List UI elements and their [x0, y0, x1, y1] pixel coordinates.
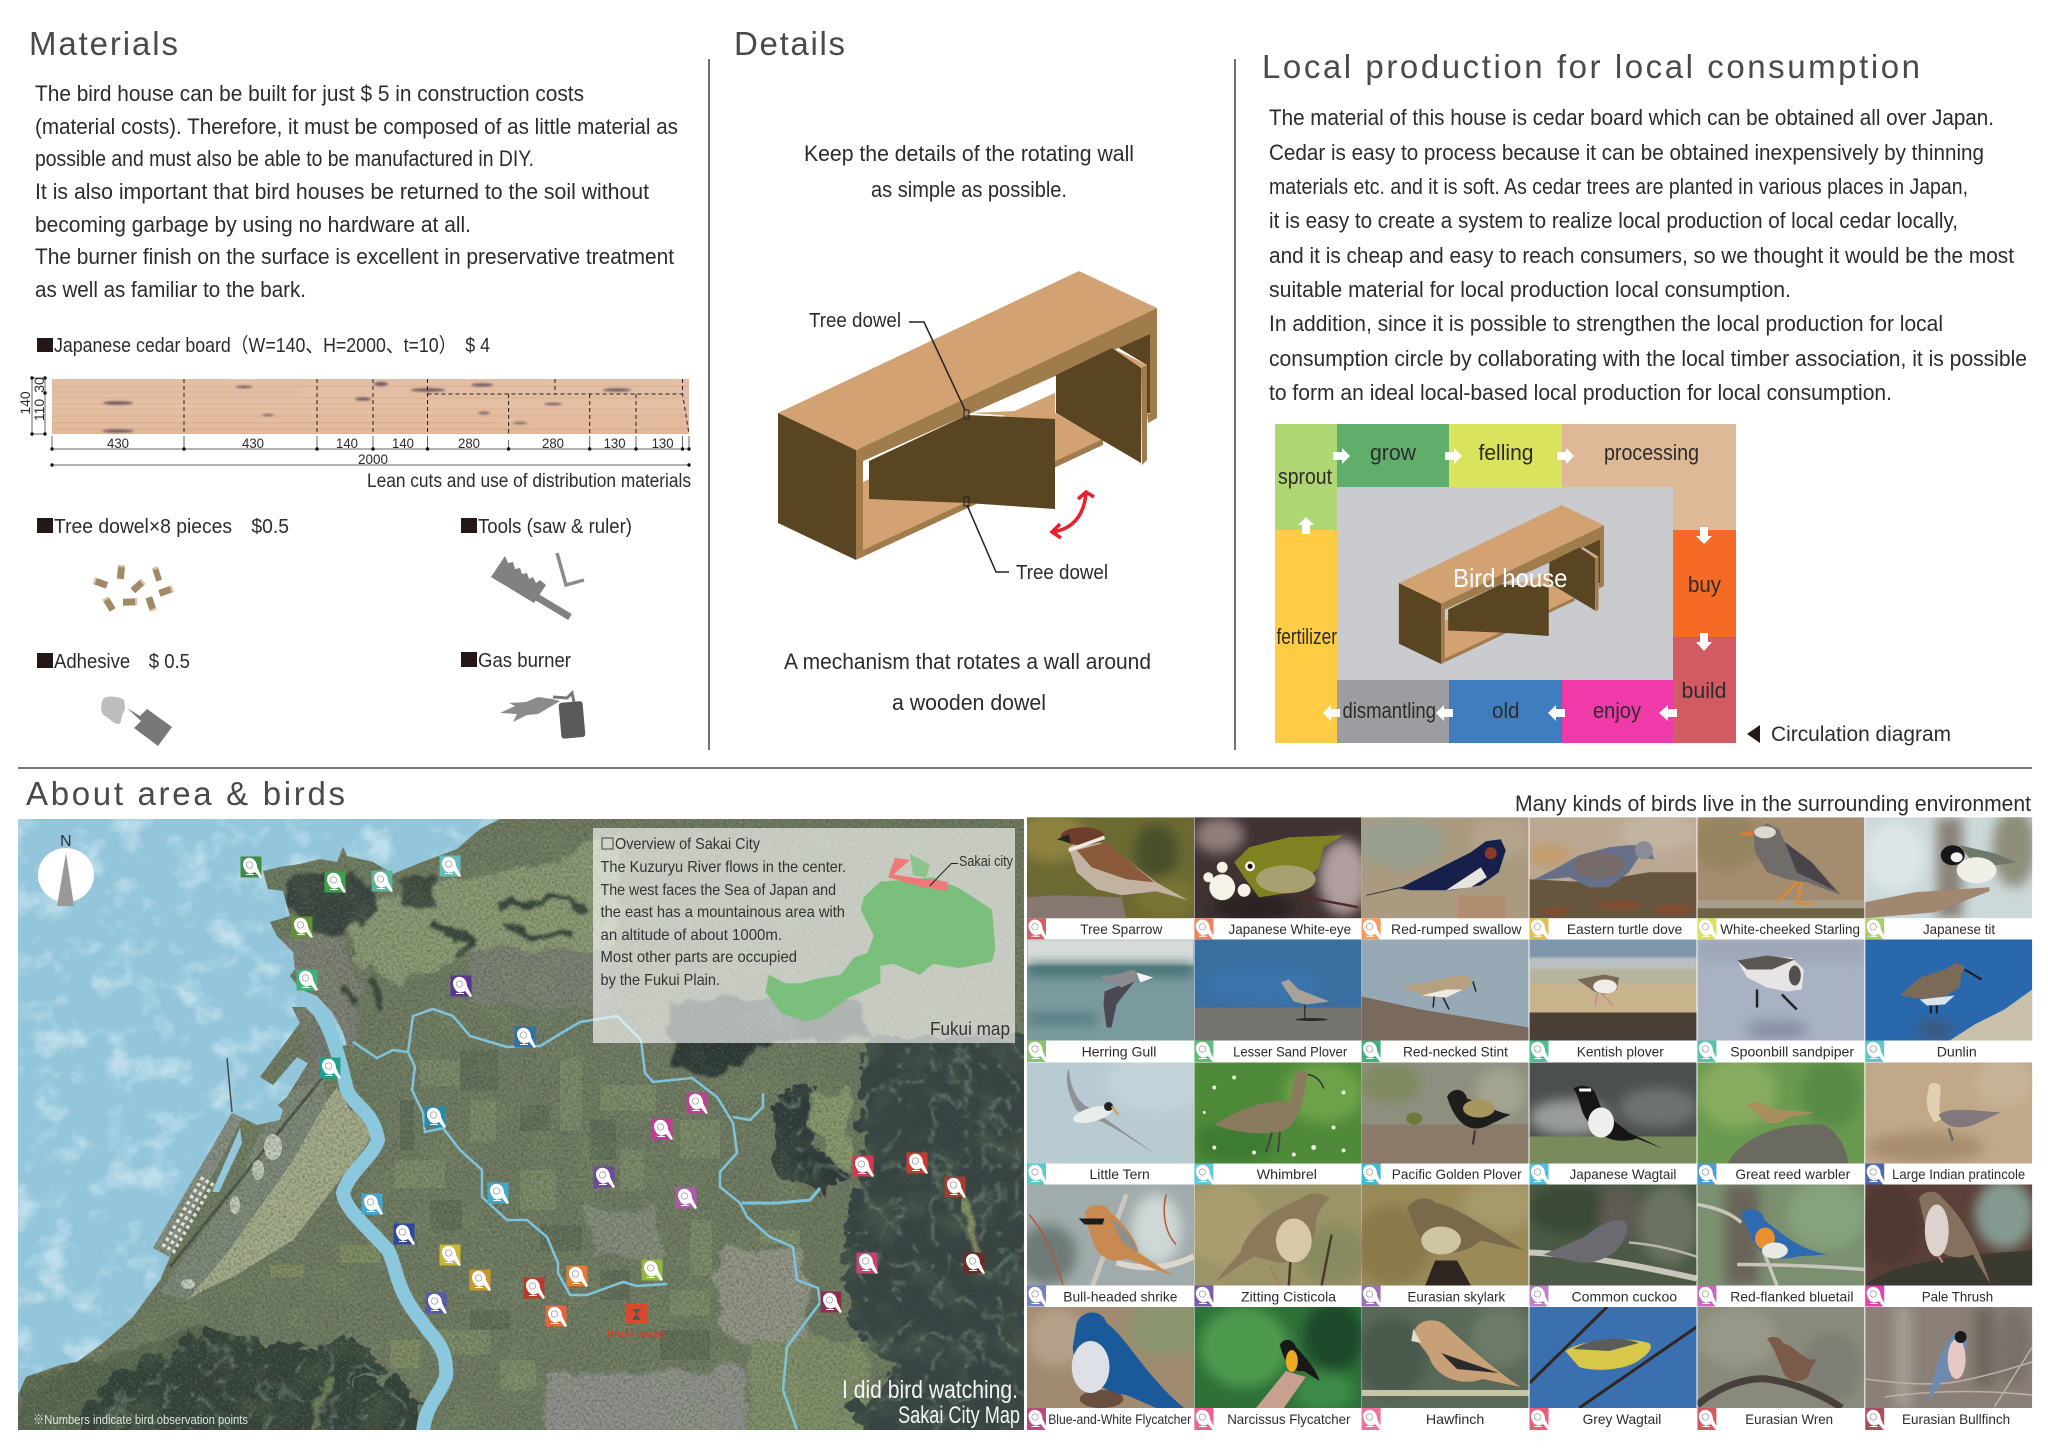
dowel callout: upper: Tree dowel: [809, 310, 901, 332]
caption: circulation diagram: Circulation diagram: [1771, 723, 1951, 746]
map: Sakai City satellite: [18, 819, 1030, 1440]
name: Eurasian skylark: [1408, 1289, 1506, 1305]
stage: old: [1449, 680, 1562, 743]
name: Red-necked Stint: [1403, 1044, 1508, 1060]
card: Great reed warbler: [1697, 1058, 1864, 1185]
text block: mechanism: a wooden dowel: [892, 690, 1046, 715]
text block: materials intro: The bird house can be built for just $ 5 in construction costs: [35, 81, 584, 106]
name: Kentish plover: [1577, 1044, 1664, 1060]
photo: [1697, 1184, 1864, 1286]
card: Large Indian pratincole: [1865, 1058, 2034, 1185]
text block: materials intro: [35, 81, 678, 302]
photo: [1697, 1062, 1864, 1164]
sub heading: many kinds of birds: Many kinds of birds live in the surrounding environment: [1515, 791, 2031, 816]
text block: local production body: In addition, since it is possible to strengthen the local production for local: [1269, 311, 1943, 336]
icon: [1530, 1164, 1550, 1185]
icon: adhesive bottle: [101, 697, 172, 746]
text: overview: an altitude of about 1000m.: [600, 927, 782, 944]
dowel callout: upper: [809, 310, 969, 419]
icon: saw and ruler: [491, 553, 584, 617]
item heading: tools: Tools (saw & ruler): [478, 516, 632, 538]
icon: tree dowels: [93, 565, 174, 612]
industrial port land: [187, 1087, 370, 1300]
center illustration: bird house: Bird house: [1453, 563, 1568, 593]
southwest forested hills: [78, 1326, 424, 1430]
photo: [1362, 1307, 1529, 1408]
photo: [1530, 1307, 1696, 1408]
photo: [1530, 940, 1696, 1040]
icon: [1194, 1408, 1215, 1430]
stage: sprout: sprout: [1278, 464, 1332, 489]
stage: felling: felling: [1478, 440, 1534, 465]
panel: details: [734, 25, 1157, 715]
icon: [1027, 1164, 1048, 1185]
photo: [1697, 817, 1864, 918]
icon: [1362, 1286, 1382, 1307]
icon: [1194, 1286, 1215, 1307]
icon: [1530, 1286, 1550, 1307]
arrows: circulation flow: [1298, 448, 1712, 721]
panel: materials: [17, 25, 691, 746]
name: Herring Gull: [1082, 1044, 1156, 1060]
dimension labels: 140: [392, 435, 414, 451]
cedar board cutting diagram: [17, 376, 691, 467]
northern farmland and wetlands: [285, 830, 620, 1010]
card: Zitting Cisticola: [1184, 1184, 1368, 1307]
name: Lesser Sand Plover: [1233, 1044, 1348, 1060]
text block: local production body: [1269, 105, 2027, 405]
text block: mechanism: [784, 649, 1151, 715]
text: overview: Most other parts are occupied: [600, 949, 797, 966]
icon: [1362, 1164, 1382, 1185]
photo: [1027, 1062, 1194, 1164]
icon: [1697, 1040, 1718, 1062]
title: Materials: Materials: [29, 25, 178, 62]
name: Whimbrel: [1257, 1166, 1317, 1182]
icon: [1027, 1286, 1048, 1307]
card: Hawfinch: [1357, 1307, 1531, 1430]
name: Bull-headed shrike: [1063, 1289, 1178, 1305]
photo: [1697, 1307, 1864, 1408]
text block: local production body: and it is cheap and easy to reach consumers, so we thought it would be the most: [1269, 243, 2014, 268]
icon: [1194, 918, 1215, 940]
stage: sprout: [1275, 424, 1337, 530]
land texture: [23, 882, 1024, 1430]
label: Sakai city: Sakai city: [959, 853, 1013, 870]
dimension labels: 280: [542, 435, 564, 451]
text block: materials intro: The burner finish on the surface is excellent in preservative treatment: [35, 244, 674, 269]
photo: [1027, 940, 1194, 1040]
grey settlements: [18, 930, 880, 1440]
text block: keep details simple: Keep the details of the rotating wall: [804, 141, 1134, 166]
name: Pale Thrush: [1922, 1289, 1993, 1305]
card: Grey Wagtail: [1530, 1307, 1696, 1430]
dimension labels: 130: [652, 435, 674, 451]
item heading: tree dowel: Tree dowel×8 pieces $0.5: [54, 516, 289, 538]
plain field patches: [395, 1060, 800, 1390]
stage: build: build: [1682, 678, 1726, 703]
circulation diagram: [1275, 424, 1736, 743]
title: Local production: Local production for local consumption: [1262, 48, 1920, 85]
name: Japanese White-eye: [1228, 921, 1351, 937]
stage: dismantling: [1337, 680, 1449, 743]
name: Pacific Golden Plover: [1392, 1166, 1522, 1182]
icon: [1362, 1040, 1382, 1062]
name: Dunlin: [1937, 1044, 1977, 1060]
name: Japanese Wagtail: [1570, 1166, 1676, 1182]
text block: materials intro: (material costs). Therefore, it must be composed of as little material as: [35, 114, 678, 139]
photo: [1530, 1062, 1696, 1164]
stage: buy: [1673, 530, 1736, 637]
card: Eurasian skylark: [1352, 1180, 1541, 1307]
dimension labels: 2000: [358, 451, 388, 467]
text block: materials intro: as well as familiar to the bark.: [35, 277, 306, 302]
stage: enjoy: enjoy: [1593, 698, 1641, 723]
icon: [1865, 1408, 1886, 1430]
eastern mountains: [837, 1030, 1030, 1440]
card: Japanese tit: [1865, 807, 2036, 940]
card: Eurasian Bullfinch: [1865, 1307, 2032, 1430]
icon: [1362, 918, 1382, 940]
text: overview: by the Fukui Plain.: [600, 972, 720, 989]
name: Common cuckoo: [1572, 1289, 1677, 1305]
text block: keep details simple: as simple as possible.: [871, 177, 1067, 202]
text: overview: The Kuzuryu River flows in the center.: [600, 859, 846, 876]
name: Blue-and-White Flycatcher: [1048, 1411, 1191, 1427]
name: Red-rumped swallow: [1391, 921, 1522, 937]
card: Herring Gull: [1027, 940, 1194, 1062]
card: Little Tern: [1027, 1052, 1206, 1185]
item heading: cedar board: Japanese cedar board（W=140、H=2000、t=10） $ 4: [54, 334, 490, 357]
photo: [1362, 940, 1529, 1040]
card: Tree Sparrow: [1017, 812, 1196, 940]
card: White-cheeked Starling: [1692, 814, 1864, 940]
photo: [1865, 1184, 2032, 1286]
dimension labels: [17, 377, 674, 467]
name: Hawfinch: [1426, 1411, 1484, 1427]
title: About area & birds: About area & birds: [26, 775, 345, 812]
dimension labels: 110: [31, 399, 47, 421]
card: Blue-and-White Flycatcher: [1027, 1297, 1206, 1430]
photo: [1865, 1307, 2032, 1408]
mini map: Fukui: [765, 854, 995, 1021]
caption: lean cuts: Lean cuts and use of distribution materials: [367, 471, 691, 492]
dimension labels: 30: [31, 377, 47, 393]
photo: [1362, 1062, 1529, 1164]
stage: grow: grow: [1370, 440, 1416, 465]
west fields patch: [270, 1245, 420, 1368]
card: Pacific Golden Plover: [1362, 1062, 1529, 1185]
name: Red-flanked bluetail: [1730, 1289, 1854, 1305]
icon: [1530, 1040, 1550, 1062]
photo: [1194, 1062, 1362, 1164]
text block: materials intro: becoming garbage by using no hardware at all.: [35, 212, 471, 237]
name: Tree Sparrow: [1080, 921, 1163, 937]
compass: north: N: [60, 833, 72, 850]
card: Japanese Wagtail: [1530, 1062, 1698, 1185]
item heading: gas burner: Gas burner: [478, 650, 571, 672]
stage: buy: buy: [1688, 572, 1721, 597]
text: overview: [600, 836, 846, 989]
land: [18, 819, 1024, 1430]
stage: dismantling: dismantling: [1342, 698, 1436, 723]
stage: processing: processing: [1604, 440, 1699, 465]
text block: mechanism: A mechanism that rotates a wall around: [784, 649, 1151, 674]
photo: [1530, 1184, 1696, 1286]
caption: bird watching: [842, 1376, 1020, 1429]
name: Narcissus Flycatcher: [1227, 1411, 1351, 1427]
divider: materials / details: [708, 59, 710, 750]
stage: grow: [1337, 424, 1449, 487]
text block: local production body: suitable material for local production local consumption.: [1269, 277, 1791, 302]
name: Spoonbill sandpiper: [1730, 1044, 1854, 1060]
icon: [1697, 1164, 1718, 1185]
bird photo grid: [1017, 807, 2036, 1430]
card: Kentish plover: [1530, 940, 1696, 1062]
card: Narcissus Flycatcher: [1194, 1302, 1363, 1430]
photo: [1027, 1307, 1194, 1408]
text block: local production body: it is easy to create a system to realize local production of local cedar locally,: [1269, 208, 1958, 233]
photo: [1865, 817, 2032, 918]
text: overview: Overview of Sakai City: [615, 836, 760, 853]
card: Japanese White-eye: [1194, 817, 1368, 940]
icon: [1027, 1408, 1048, 1430]
Kuzuryu river: [320, 1013, 446, 1432]
dimension lines: [32, 378, 689, 465]
observation point markers: [240, 856, 985, 1327]
dimension labels: 140: [336, 435, 358, 451]
item heading: adhesive: Adhesive $ 0.5: [54, 651, 190, 673]
text block: local production body: consumption circle by collaborating with the local timber association, it is possible: [1269, 346, 2027, 371]
icon: [1530, 918, 1550, 940]
text block: local production body: The material of this house is cedar board which can be obtained all over Japan.: [1269, 105, 1994, 130]
card: Red-rumped swallow: [1357, 817, 1531, 940]
dimension labels: 130: [604, 435, 626, 451]
caption: bird watching: Sakai City Map: [898, 1402, 1020, 1429]
icon: [1194, 1040, 1215, 1062]
icon: [1865, 1286, 1886, 1307]
card: Spoonbill sandpiper: [1697, 940, 1864, 1062]
marker: Bird House location: [607, 1304, 664, 1341]
name: Zitting Cisticola: [1241, 1289, 1336, 1305]
marker: Bird House location: Bird House: [607, 1326, 664, 1341]
tributaries: [353, 1009, 820, 1430]
stage: old: old: [1492, 698, 1520, 723]
photo: [1194, 1184, 1362, 1286]
icon: [1697, 1408, 1718, 1430]
card: Eurasian Wren: [1697, 1307, 1864, 1430]
photo: [1865, 940, 2032, 1040]
card: Whimbrel: [1194, 1062, 1363, 1185]
text block: materials intro: possible and must also be able to be manufactured in DIY.: [35, 146, 534, 171]
photo: [1027, 1184, 1194, 1286]
text block: local production body: Cedar is easy to process because it can be obtained inexpensively by thinning: [1269, 140, 1984, 165]
name: Eurasian Wren: [1745, 1411, 1833, 1427]
name: Large Indian pratincole: [1892, 1166, 2025, 1182]
compass: north: [38, 833, 94, 906]
name: Great reed warbler: [1735, 1166, 1851, 1182]
name: Eastern turtle dove: [1567, 921, 1683, 937]
panel: about area and birds: [18, 775, 2031, 1440]
dimension labels: 140: [17, 391, 33, 415]
name: Little Tern: [1090, 1166, 1150, 1182]
dimension labels: 280: [458, 435, 480, 451]
name: Japanese tit: [1923, 921, 1995, 937]
card: Dunlin: [1865, 940, 2032, 1062]
icon: [1865, 1040, 1886, 1062]
note: observation points: ※Numbers indicate bird observation points: [33, 1412, 248, 1427]
text block: local production body: materials etc. and it is soft. As cedar trees are planted in various places in Japan,: [1269, 174, 1968, 199]
icon: [1865, 918, 1886, 940]
text block: materials intro: It is also important that bird houses be returned to the soil without: [35, 179, 649, 204]
center illustration: bird house: [1399, 505, 1604, 664]
photo: [1865, 1062, 2032, 1164]
text: overview: the east has a mountainous area with: [600, 904, 845, 921]
label: Fukui map: Fukui map: [930, 1019, 1010, 1039]
photo: [1194, 1307, 1362, 1408]
icon: [1697, 1286, 1718, 1307]
caption: bird watching: I did bird watching.: [842, 1376, 1018, 1404]
name: Eurasian Bullfinch: [1902, 1411, 2010, 1427]
text: overview: The west faces the Sea of Japan and: [600, 882, 836, 899]
name: White-cheeked Starling: [1720, 921, 1860, 937]
divider: top / bottom: [18, 767, 2032, 769]
dowel callout: lower: Tree dowel: [1016, 562, 1108, 584]
dimension labels: 430: [107, 435, 129, 451]
card: Pale Thrush: [1860, 1180, 2034, 1307]
overlay panel: overview of Sakai City: [593, 828, 1015, 1043]
photo: [1027, 817, 1194, 918]
stage: build: [1673, 637, 1736, 743]
icon: gas burner: [500, 693, 586, 739]
photo: [1697, 940, 1864, 1040]
dimension labels: 430: [242, 435, 264, 451]
photo: [1194, 817, 1362, 918]
photo: [1362, 817, 1529, 918]
icon: [1697, 918, 1718, 940]
icon: [1194, 1164, 1215, 1185]
card: Red-flanked bluetail: [1697, 1180, 1866, 1307]
card: Eastern turtle dove: [1528, 814, 1698, 940]
stage: processing: [1562, 424, 1736, 530]
dowel callout: lower: [964, 497, 1108, 584]
arrow: rotation direction: [1052, 492, 1094, 538]
icon: [1027, 1040, 1048, 1062]
title: Details: Details: [734, 25, 845, 62]
photo: [1530, 817, 1696, 918]
stage: enjoy: [1562, 680, 1673, 743]
text block: local production body: to form an ideal local-based local production for local consumption.: [1269, 380, 1892, 405]
icon: [1027, 918, 1048, 940]
icon: [1362, 1408, 1382, 1430]
text block: keep details simple: [804, 141, 1134, 202]
stage: fertilizer: [1275, 530, 1337, 743]
illustration: bird house with rotating wall: [778, 271, 1157, 560]
photo: [1194, 940, 1362, 1040]
card: Bull-headed shrike: [1017, 1184, 1194, 1307]
stage: felling: [1449, 424, 1562, 487]
icon: [1865, 1164, 1886, 1185]
divider: details / local production: [1234, 59, 1236, 750]
card: Lesser Sand Plover: [1194, 940, 1361, 1062]
card: Common cuckoo: [1530, 1184, 1698, 1307]
icon: [1530, 1408, 1550, 1430]
panel: local production: [1262, 48, 2027, 746]
card: Red-necked Stint: [1362, 940, 1529, 1062]
stage: fertilizer: fertilizer: [1276, 624, 1337, 649]
harbor water and pier: [163, 1058, 242, 1253]
photo: [1362, 1184, 1529, 1286]
name: Grey Wagtail: [1583, 1411, 1661, 1427]
